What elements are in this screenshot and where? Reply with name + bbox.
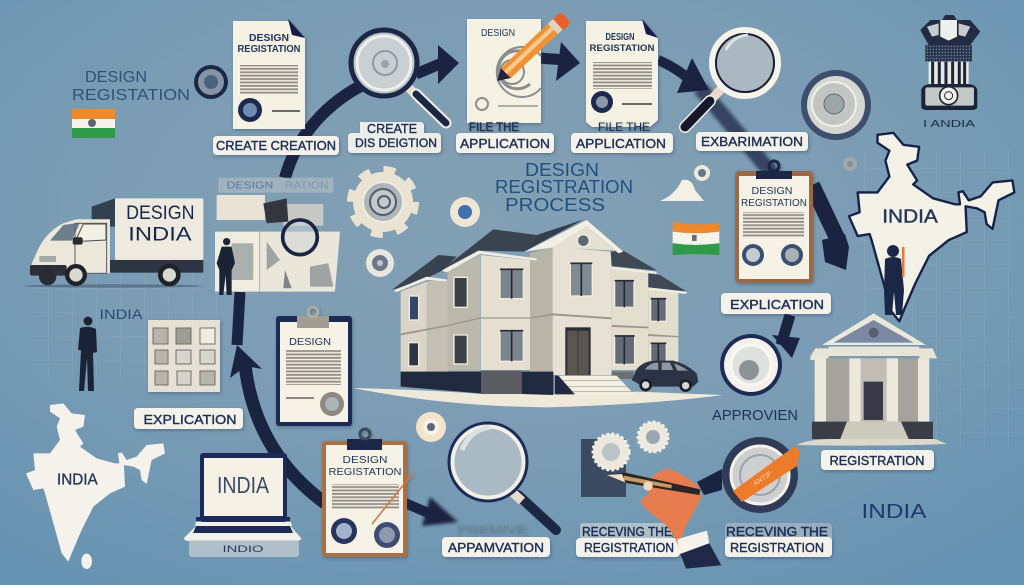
label: receiving the registration 2: REGISTRATION <box>730 540 824 555</box>
icon: large seal <box>801 70 871 140</box>
document: file application with pencil <box>467 19 541 123</box>
clipboard: design navy: DESIGN <box>289 337 331 348</box>
panel: design grid <box>148 320 220 392</box>
figure: person left <box>78 316 97 391</box>
icon: state emblem <box>920 15 980 110</box>
truck: INDIA <box>128 225 192 246</box>
document: create: REGISTATION <box>238 44 300 55</box>
text: title: PROCESS <box>505 195 605 215</box>
text: india near person: INDIA <box>100 306 143 322</box>
icon: small seal <box>194 65 228 99</box>
document: create: DESIGN <box>249 33 289 44</box>
label: create dis deigtion: DIS DEIGTION <box>355 136 437 150</box>
clipboard: design registration bottom <box>322 429 413 557</box>
icon: bank building <box>797 313 947 446</box>
label: exbarimation: EXBARIMATION <box>701 134 803 149</box>
icon: hand with pen <box>607 468 721 569</box>
label: file the application 1: FILE THE <box>469 120 519 134</box>
document: create <box>233 19 305 129</box>
icon: gear <box>353 172 413 232</box>
label: receiving the registration 2 <box>725 523 832 557</box>
label: receiving the registration 1 <box>576 523 680 557</box>
label: registration: REGISTRATION <box>830 453 924 468</box>
icon: magnifier approval <box>449 423 556 530</box>
truck: DESIGN <box>126 203 194 224</box>
heading: design registation <box>72 69 190 104</box>
label: file the application 1: APPLICATION <box>460 136 550 151</box>
text: title: REGISTRATION <box>495 177 633 197</box>
label: explication right: EXPLICATION <box>730 297 824 312</box>
icon: magnifier create <box>351 30 446 123</box>
icon: small circles <box>366 157 857 442</box>
flow arrows <box>230 42 849 526</box>
label: create creation: CREATE CREATION <box>216 138 336 153</box>
label: receiving the registration 1: REGISTRATION <box>584 540 674 555</box>
clipboard: design registration right: DESIGN <box>752 186 792 197</box>
label: file the application 1 <box>456 120 554 153</box>
label: create dis deigtion <box>348 121 441 153</box>
truck <box>23 198 203 288</box>
text: india bottom right: INDIA <box>862 501 927 523</box>
illustration: design workshop: RATION <box>285 181 328 192</box>
clipboard: design registration right <box>735 161 813 283</box>
icon: gears and certificate <box>581 422 668 497</box>
icon: mountain <box>660 180 704 201</box>
label: premive appamvation <box>442 524 550 557</box>
label: file the application 2: APPLICATION <box>576 136 666 151</box>
icon: india flag small <box>72 109 115 138</box>
text: title <box>495 160 633 215</box>
document: design registration: REGISTATION <box>590 43 654 53</box>
text: i andia: I ANDIA <box>923 119 975 130</box>
clipboard: design registration bottom: DESIGN <box>342 455 388 466</box>
laptop <box>184 453 301 557</box>
icon: pencil <box>497 13 569 81</box>
map: india right <box>849 133 1014 321</box>
document: design registration <box>586 19 658 127</box>
map: india left: INDIA <box>57 472 98 489</box>
icon: stamp seal with orange ribbon <box>722 437 800 513</box>
icon: flag india <box>673 222 719 255</box>
label: explication right <box>721 293 831 314</box>
figure: person on map <box>884 245 904 315</box>
label: file the application 2 <box>571 120 673 153</box>
illustration: design workshop <box>215 178 340 295</box>
label: receiving the registration 2: RECEVING THE <box>726 524 828 539</box>
label: receiving the registration 1: RECEVING THE <box>582 524 672 539</box>
laptop: INDIO <box>222 544 264 555</box>
label: exbarimation <box>696 132 808 151</box>
heading: design registation: REGISTATION <box>72 87 190 104</box>
laptop: INDIA <box>217 472 270 498</box>
clipboard: design navy <box>276 307 352 426</box>
text: title: DESIGN <box>525 160 599 180</box>
map: india left <box>26 403 165 569</box>
icon: stamp seal with orange ribbon: ANTIP <box>752 470 774 488</box>
label: premive appamvation: APPAMVATION <box>448 540 544 555</box>
icon: magnifier examination <box>685 30 778 127</box>
document: file application with pencil: DESIGN <box>481 28 515 39</box>
map: india right: INDIA <box>882 206 938 227</box>
label: create dis deigtion: CREATE <box>367 121 417 136</box>
text: approvien: APPROVIEN <box>712 407 798 424</box>
label: premive appamvation: PREMIVE <box>457 524 527 536</box>
label: explication left <box>134 408 243 429</box>
document: design registration: DESIGN <box>606 32 634 43</box>
clipboard: design registration right: REGISTATION <box>741 198 807 209</box>
icon: approval seal <box>720 334 782 396</box>
label: explication left: EXPLICATION <box>144 412 236 427</box>
clipboard: design registration bottom: REGISTATION <box>328 467 402 478</box>
illustration: design workshop: DESIGN <box>227 181 273 192</box>
label: registration <box>821 450 934 470</box>
house <box>353 219 723 407</box>
label: file the application 2: FILE THE <box>598 120 650 134</box>
heading: design registation: DESIGN <box>85 69 147 86</box>
